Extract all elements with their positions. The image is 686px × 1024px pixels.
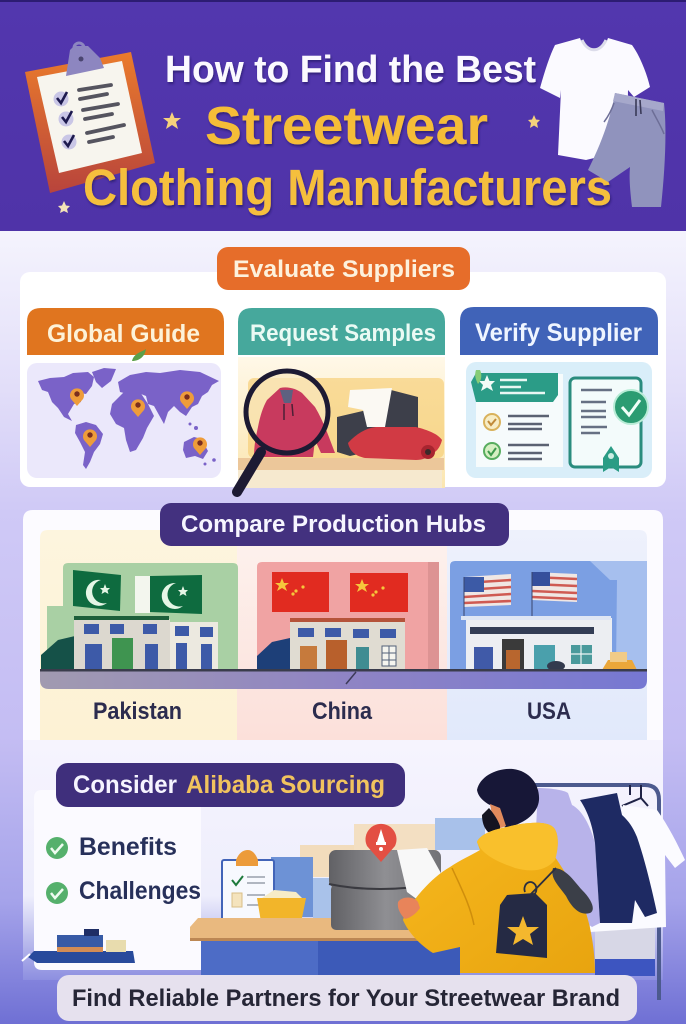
- tabletop: [190, 918, 440, 940]
- title: [83, 49, 612, 216]
- shelf: [238, 458, 444, 470]
- title: Clothing Manufacturers: [83, 159, 612, 216]
- icon: cargo ship: [22, 929, 135, 963]
- road strip: [40, 669, 647, 689]
- checklist rows: [484, 414, 500, 430]
- benefits list: [46, 833, 201, 905]
- footer pill: [57, 975, 637, 1021]
- factory building: [74, 619, 170, 670]
- hub: china: [257, 562, 439, 670]
- hair: [477, 769, 539, 828]
- hub labels: USA: [527, 698, 571, 725]
- icon: map pins: [70, 388, 207, 455]
- header banner: [0, 0, 686, 231]
- card: request samples: Request Samples: [250, 320, 436, 347]
- icon: red hoodie: [254, 387, 335, 457]
- panel: evaluate suppliers: [20, 247, 666, 492]
- icon: pakistan flags: [73, 570, 202, 614]
- icon: grey sweatpants: [588, 93, 665, 207]
- hub labels: Pakistan: [93, 698, 182, 725]
- title: How to Find the Best: [165, 49, 536, 91]
- white tee: [590, 805, 685, 932]
- icon: yellow basket: [257, 890, 306, 928]
- desk front: [201, 940, 441, 976]
- factory building: [290, 621, 405, 670]
- card: request samples: [237, 308, 445, 492]
- card: global guide: Global Guide: [47, 320, 200, 348]
- boxes behind: [300, 845, 356, 877]
- benefits list: Challenges: [79, 877, 201, 905]
- desk scene: [190, 818, 655, 976]
- sling pouch: [552, 868, 593, 914]
- hoodie body: [403, 823, 595, 973]
- panel: compare production hubs: [23, 503, 663, 760]
- heading pill: evaluate suppliers: Evaluate Suppliers: [233, 256, 455, 283]
- panel: alibaba sourcing: [22, 740, 685, 1000]
- face mask: [482, 808, 500, 832]
- icon: usa flags: [464, 572, 577, 616]
- heading pill: consider alibaba sourcing: [56, 763, 405, 807]
- heading pill: compare production hubs: [160, 503, 509, 546]
- factory building: [466, 618, 612, 670]
- icon: folded red garment: [348, 427, 442, 460]
- hub labels: China: [312, 698, 373, 725]
- icon: star pouch: [496, 868, 556, 958]
- icon: dark garment bags: [337, 390, 418, 456]
- icon: clipboard checklist: [25, 43, 155, 193]
- green tag banner: [471, 373, 558, 402]
- icon: clipboard on desk: [222, 850, 274, 929]
- rack base: [595, 927, 655, 959]
- icon: china flags: [272, 572, 408, 612]
- card: verify supplier: Verify Supplier: [475, 319, 642, 347]
- benefits list: Benefits: [79, 833, 177, 861]
- hand: [398, 898, 420, 919]
- lilac hoodie: [535, 788, 600, 927]
- footer pill: Find Reliable Partners for Your Streetwear Brand: [72, 985, 620, 1012]
- card: global guide: [27, 308, 224, 478]
- person in yellow hoodie: [398, 769, 595, 973]
- icon: receipt: [348, 388, 392, 427]
- heading pill: compare production hubs: Compare Production Hubs: [181, 511, 486, 538]
- navy jacket: [580, 793, 657, 923]
- icon: alert pin: [366, 824, 396, 862]
- hub labels: [93, 698, 571, 725]
- receipt: [397, 848, 442, 903]
- icon: certificate with green check: [570, 378, 641, 467]
- icon: magnifying glass: [237, 371, 328, 492]
- icon: stars: [58, 112, 540, 213]
- heading pill: evaluate suppliers: [217, 247, 470, 290]
- title: Streetwear: [205, 96, 488, 156]
- heading pill: consider alibaba sourcing: Consider: [73, 771, 177, 799]
- hub: pakistan: [41, 563, 238, 670]
- card: verify supplier: [460, 307, 658, 478]
- icon: clothes rack: [535, 785, 685, 1000]
- heading pill: consider alibaba sourcing: Alibaba Sourcing: [186, 771, 385, 799]
- face: [490, 804, 506, 830]
- hub: usa: [450, 561, 647, 671]
- icon: white t-shirt: [540, 38, 650, 160]
- icon: world map: [38, 368, 219, 469]
- icon: grey bags: [329, 850, 441, 930]
- colored backdrop strips: [40, 530, 237, 740]
- magnifier lens: [246, 371, 328, 453]
- white checklist sheet: [476, 374, 563, 467]
